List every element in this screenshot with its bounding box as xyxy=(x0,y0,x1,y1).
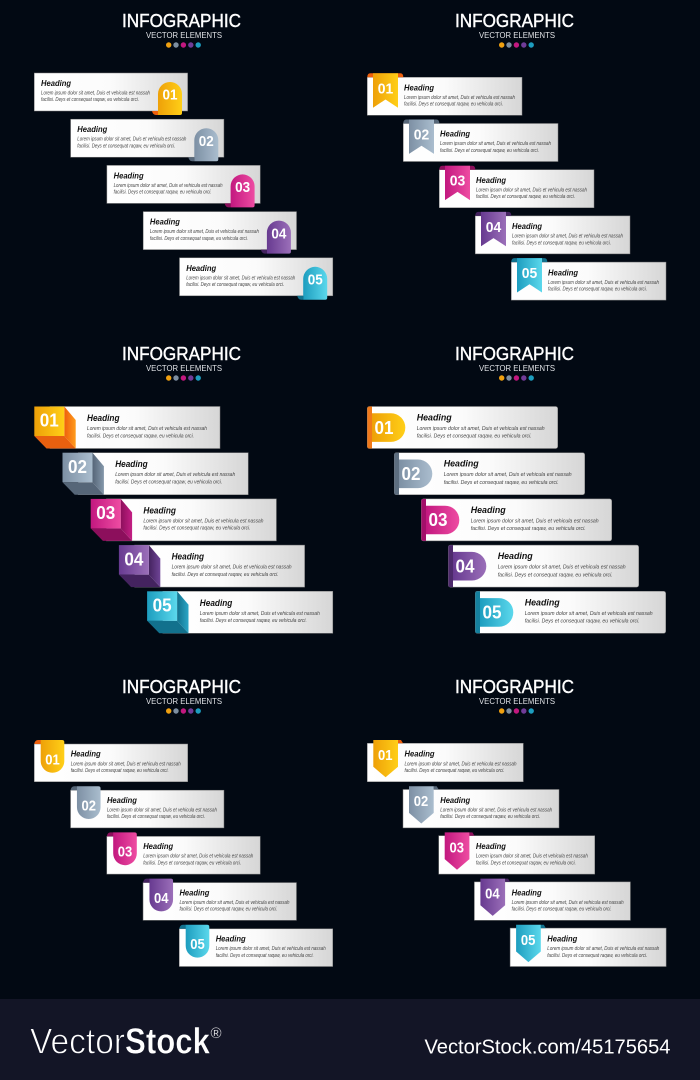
step 04: Heading xyxy=(512,887,542,897)
step 04: Lorem ipsum dolor sit amet, Duis et vehicula est nassah xyxy=(150,229,259,235)
step 02: Lorem ipsum dolor sit amet, Duis et vehicula est nassah xyxy=(107,807,217,813)
footer logo: Vector: Vector xyxy=(30,1020,125,1062)
step 01: Heading xyxy=(87,413,120,423)
panel title: VECTOR ELEMENTS xyxy=(146,363,222,373)
panel title: INFOGRAPHIC xyxy=(122,344,241,364)
step 01 xyxy=(34,740,188,782)
step 02: facilisi. Deys et consequat raqaw, eu vehicula orci. xyxy=(107,814,205,820)
step 04 xyxy=(143,212,296,254)
step 04: 04 xyxy=(485,886,500,903)
step 03: Lorem ipsum dolor sit amet, Duis et vehicula est nassah xyxy=(476,187,587,193)
panel title: INFOGRAPHIC xyxy=(122,677,241,697)
step 02: facilisi. Deys et consequat raqaw, eu vehicula orci. xyxy=(440,814,540,820)
step 05 xyxy=(511,258,666,300)
step 05: Lorem ipsum dolor sit amet, Duis et vehicula est nassah xyxy=(186,275,295,281)
footer band xyxy=(0,999,700,1080)
step 01 xyxy=(367,406,558,448)
step 05: Heading xyxy=(548,267,579,277)
step 03: Heading xyxy=(476,841,507,851)
step 01: Heading xyxy=(41,78,72,88)
step 01 xyxy=(367,740,523,782)
step 01: facilisi. Deys et consequat raqaw, eu vehicula orci. xyxy=(404,102,503,108)
step 03: Lorem ipsum dolor sit amet, Duis et vehicula est nassah xyxy=(143,854,253,860)
step 04: facilisi. Deys et consequat raqaw, eu vehicula orci. xyxy=(512,907,612,913)
step 02 xyxy=(71,119,224,161)
step 02: facilisi. Deys et consequat raqaw, eu vehicula orci. xyxy=(444,480,559,486)
step 04: Heading xyxy=(179,887,210,897)
step 01: facilisi. Deys et consequat raqaw, eu vehicula orci. xyxy=(417,434,532,440)
step 04: Heading xyxy=(150,217,181,227)
panel title xyxy=(122,344,241,381)
step 05: 05 xyxy=(482,603,502,623)
step 01: Heading xyxy=(404,749,435,759)
step 03: 03 xyxy=(118,844,132,861)
step 04: Heading xyxy=(512,221,543,231)
step 01: Lorem ipsum dolor sit amet, Duis et vehicula est nassah xyxy=(71,761,181,767)
step 04: Lorem ipsum dolor sit amet, Duis et vehicula est nassah xyxy=(172,565,292,571)
footer image id: VectorStock.com/45175654 xyxy=(424,1036,670,1058)
step 05: Lorem ipsum dolor sit amet, Duis et vehicula est nassah xyxy=(525,611,653,617)
step 01: facilisi. Deys et consequat raqaw, eu vehicula orci. xyxy=(404,768,504,774)
step 02 xyxy=(62,453,248,495)
panel title: INFOGRAPHIC xyxy=(455,11,574,31)
step 05: Lorem ipsum dolor sit amet, Duis et vehicula est nassah xyxy=(200,611,320,617)
step 02: Heading xyxy=(107,795,138,805)
step 03: Heading xyxy=(143,841,174,851)
step 02: 02 xyxy=(414,127,429,144)
panel title xyxy=(122,677,241,714)
step 05: Heading xyxy=(525,597,560,607)
step 04: Lorem ipsum dolor sit amet, Duis et vehicula est nassah xyxy=(512,234,623,240)
step 03: Lorem ipsum dolor sit amet, Duis et vehicula est nassah xyxy=(476,854,588,860)
panel title: VECTOR ELEMENTS xyxy=(146,696,222,706)
step 01: Lorem ipsum dolor sit amet, Duis et vehicula est nassah xyxy=(404,761,517,767)
step 05: 05 xyxy=(521,932,535,949)
step 03: facilisi. Deys et consequat raqaw, eu vehicula orci. xyxy=(476,194,575,200)
step 01 xyxy=(34,406,220,448)
step 05: Lorem ipsum dolor sit amet, Duis et vehicula est nassah xyxy=(548,280,659,286)
step 02: 02 xyxy=(68,457,87,477)
step 01: 01 xyxy=(378,80,393,97)
step 01: facilisi. Deys et consequat raqaw, eu vehicula orci. xyxy=(41,97,139,103)
panel title: INFOGRAPHIC xyxy=(122,11,241,31)
step 03: Heading xyxy=(476,175,507,185)
step 02: Lorem ipsum dolor sit amet, Duis et vehicula est nassah xyxy=(440,141,551,147)
step 04 xyxy=(474,879,630,920)
step 03: 03 xyxy=(449,839,464,856)
step 03: 03 xyxy=(450,173,465,190)
step 03: Heading xyxy=(143,505,176,515)
step 03 xyxy=(107,832,260,874)
step 02: 02 xyxy=(414,793,428,810)
step 05: 05 xyxy=(190,936,205,953)
step 01: Heading xyxy=(404,82,435,92)
panel title xyxy=(455,11,574,48)
step 04: 04 xyxy=(271,225,287,242)
step 02: 02 xyxy=(402,464,420,484)
panel: shield badges, bottom left xyxy=(34,677,333,966)
step 01 xyxy=(34,73,188,115)
step 01: 01 xyxy=(378,747,393,764)
panel title: VECTOR ELEMENTS xyxy=(479,696,555,706)
step 05: Heading xyxy=(216,934,246,944)
step 04: facilisi. Deys et consequat raqaw, eu vehicula orci. xyxy=(179,907,277,913)
step 05: Heading xyxy=(186,263,217,273)
step 01: facilisi. Deys et consequat raqaw, eu vehicula orci. xyxy=(87,433,194,439)
step 02: 02 xyxy=(199,133,214,150)
footer logo: Stock: Stock xyxy=(125,1020,211,1062)
step 01 xyxy=(367,73,522,115)
step 02: 02 xyxy=(82,797,96,814)
step 04: Heading xyxy=(498,551,533,561)
step 01: 01 xyxy=(40,411,59,431)
panel title: VECTOR ELEMENTS xyxy=(146,30,222,40)
step 05: Lorem ipsum dolor sit amet, Duis et vehicula est nassah xyxy=(547,946,659,952)
step 03: Lorem ipsum dolor sit amet, Duis et vehicula est nassah xyxy=(143,518,263,524)
step 03: facilisi. Deys et consequat raqaw, eu vehicula orci. xyxy=(476,860,576,866)
registered mark: ® xyxy=(210,1025,222,1042)
step 03: facilisi. Deys et consequat raqaw, eu vehicula orci. xyxy=(114,190,212,196)
step 02: Heading xyxy=(115,459,148,469)
step 01: Lorem ipsum dolor sit amet, Duis et vehicula est nassah xyxy=(41,90,150,96)
panel title xyxy=(455,344,574,381)
panel: tab badges, top left xyxy=(34,11,333,300)
step 01: Lorem ipsum dolor sit amet, Duis et vehicula est nassah xyxy=(87,426,207,432)
step 03: 03 xyxy=(428,510,448,530)
step 04: facilisi. Deys et consequat raqaw, eu vehicula orci. xyxy=(172,572,279,578)
step 05: 05 xyxy=(522,265,537,282)
step 01: Lorem ipsum dolor sit amet, Duis et vehicula est nassah xyxy=(404,95,515,101)
step 02: Heading xyxy=(444,459,479,469)
step 04: Lorem ipsum dolor sit amet, Duis et vehicula est nassah xyxy=(498,565,626,571)
step 05: facilisi. Deys et consequat raqaw, eu vehicula orci. xyxy=(186,282,284,288)
step 03: facilisi. Deys et consequat raqaw, eu vehicula orci. xyxy=(143,860,241,866)
step 05: 05 xyxy=(308,272,323,288)
step 05: facilisi. Deys et consequat raqaw, eu vehicula orci. xyxy=(525,619,640,625)
step 01: Heading xyxy=(417,412,452,422)
panel title: VECTOR ELEMENTS xyxy=(479,363,555,373)
step 02 xyxy=(71,786,224,828)
panel title xyxy=(122,11,241,48)
step 04 xyxy=(475,212,630,254)
step 04 xyxy=(143,879,296,920)
panel: D-shaped badges, middle right xyxy=(367,344,666,633)
panel: pentagon badges, bottom right xyxy=(367,677,666,966)
step 02: facilisi. Deys et consequat raqaw, eu vehicula orci. xyxy=(115,479,222,485)
step 05 xyxy=(475,591,666,633)
step 03 xyxy=(439,166,594,208)
step 02: Heading xyxy=(440,129,471,139)
step 02: Heading xyxy=(77,124,108,134)
step 03 xyxy=(107,165,260,207)
step 02: facilisi. Deys et consequat raqaw, eu vehicula orci. xyxy=(77,143,175,149)
step 05 xyxy=(147,591,333,633)
step 01: 01 xyxy=(374,418,394,438)
step 03: Heading xyxy=(114,170,144,180)
step 02: Lorem ipsum dolor sit amet, Duis et vehicula est nassah xyxy=(77,137,186,143)
step 01: Heading xyxy=(71,749,101,759)
step 03: facilisi. Deys et consequat raqaw, eu vehicula orci. xyxy=(471,526,586,532)
step 02: Lorem ipsum dolor sit amet, Duis et vehicula est nassah xyxy=(440,807,552,813)
step 02 xyxy=(403,786,559,828)
step 03: Heading xyxy=(471,505,506,515)
step 02: Lorem ipsum dolor sit amet, Duis et vehicula est nassah xyxy=(115,472,235,478)
step 04 xyxy=(448,545,639,587)
step 03: facilisi. Deys et consequat raqaw, eu vehicula orci. xyxy=(143,526,250,532)
step 03 xyxy=(91,499,276,541)
step 04: facilisi. Deys et consequat raqaw, eu vehicula orci. xyxy=(498,572,613,578)
step 04: facilisi. Deys et consequat raqaw, eu vehicula orci. xyxy=(512,240,611,246)
panel title: INFOGRAPHIC xyxy=(455,677,574,697)
step 04: Lorem ipsum dolor sit amet, Duis et vehicula est nassah xyxy=(512,900,624,906)
step 04: facilisi. Deys et consequat raqaw, eu vehicula orci. xyxy=(150,236,248,242)
step 04: 04 xyxy=(154,890,169,907)
step 05 xyxy=(510,925,666,966)
step 05 xyxy=(179,925,333,966)
panel title xyxy=(455,677,574,714)
step 03: Lorem ipsum dolor sit amet, Duis et vehicula est nassah xyxy=(114,183,223,189)
step 04: Lorem ipsum dolor sit amet, Duis et vehicula est nassah xyxy=(179,900,290,906)
step 05: facilisi. Deys et consequat raqaw, eu vehicula orci. xyxy=(547,953,647,959)
step 04: Heading xyxy=(172,552,204,562)
step 02: Lorem ipsum dolor sit amet, Duis et vehicula est nassah xyxy=(444,472,572,478)
step 04: 04 xyxy=(456,556,474,576)
step 03: Lorem ipsum dolor sit amet, Duis et vehicula est nassah xyxy=(471,518,599,524)
step 05: Heading xyxy=(200,598,233,608)
step 05 xyxy=(180,258,333,300)
panel: bookmark badges, top right xyxy=(367,11,666,300)
panel title: VECTOR ELEMENTS xyxy=(479,30,555,40)
step 05: facilisi. Deys et consequat raqaw, eu vehicula orci. xyxy=(200,618,307,624)
step 01: 01 xyxy=(162,87,178,104)
step 03 xyxy=(421,499,612,541)
step 02: Heading xyxy=(440,795,471,805)
step 03: 03 xyxy=(235,179,250,196)
step 02 xyxy=(394,453,585,495)
step 01: Lorem ipsum dolor sit amet, Duis et vehicula est nassah xyxy=(417,426,545,432)
step 05: facilisi. Deys et consequat raqaw, eu vehicula orci. xyxy=(548,286,647,292)
step 04: 04 xyxy=(486,219,502,236)
panel: 3D square badges, middle left xyxy=(34,344,333,633)
step 02 xyxy=(403,120,558,162)
step 04 xyxy=(119,545,305,587)
step 01: 01 xyxy=(45,751,60,768)
panel title: INFOGRAPHIC xyxy=(455,344,574,364)
step 03 xyxy=(439,832,595,874)
step 05: Heading xyxy=(547,934,578,944)
step 01: facilisi. Deys et consequat raqaw, eu vehicula orci. xyxy=(71,768,169,774)
step 05: Lorem ipsum dolor sit amet, Duis et vehicula est nassah xyxy=(216,946,326,952)
step 04: 04 xyxy=(124,549,143,569)
step 02: facilisi. Deys et consequat raqaw, eu vehicula orci. xyxy=(440,148,539,154)
step 05: facilisi. Deys et consequat raqaw, eu vehicula orci. xyxy=(216,953,314,959)
step 05: 05 xyxy=(153,596,172,616)
step 03: 03 xyxy=(96,503,115,523)
